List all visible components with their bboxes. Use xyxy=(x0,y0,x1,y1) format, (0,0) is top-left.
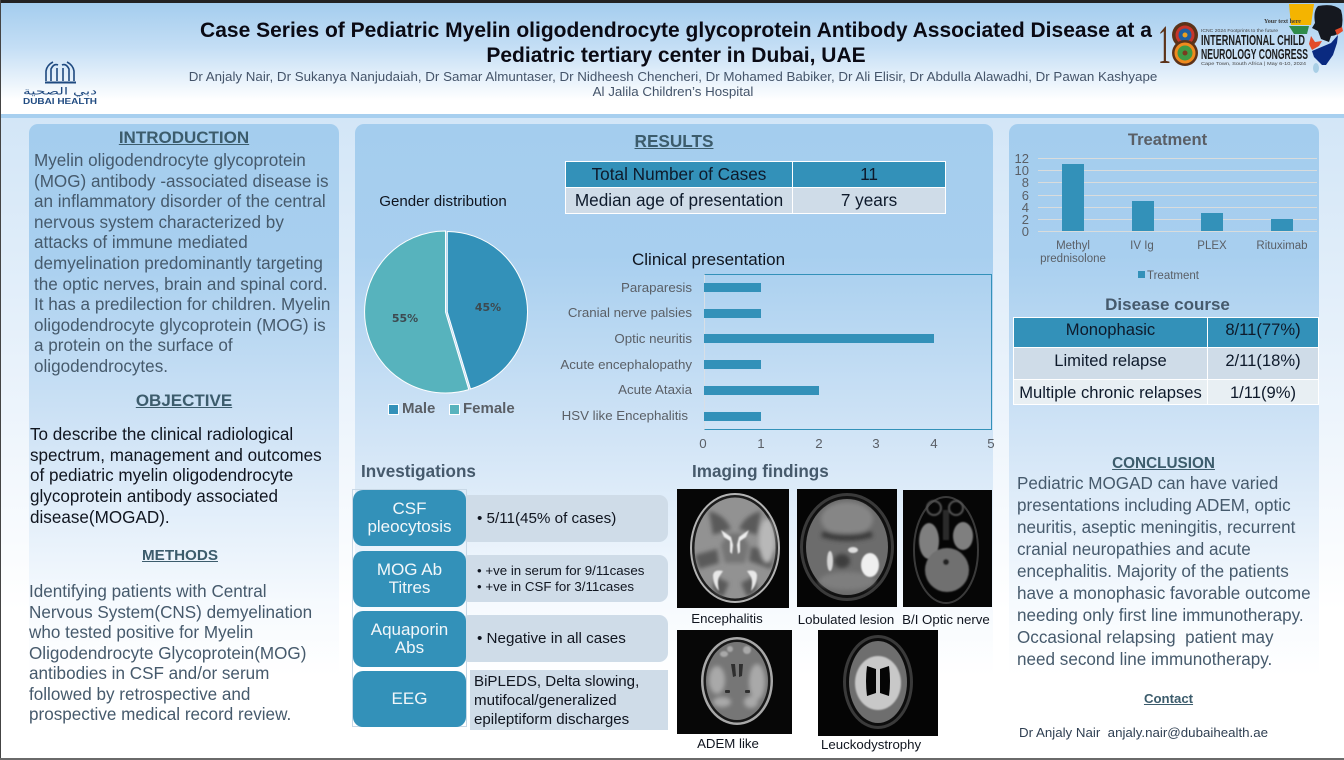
text: conclusion: have a monophasic favorable outcome xyxy=(1017,584,1311,603)
text: introduction: a protein on the surface of xyxy=(34,336,233,355)
text: conclusion xyxy=(1017,474,1311,669)
heading: investigations: Investigations xyxy=(361,462,476,481)
label: MOG: MOG Ab xyxy=(377,560,442,579)
image: lobulated lesion MRI xyxy=(797,489,897,607)
label: Aquaporin xyxy=(353,611,466,667)
caption: lobulated lesion: Lobulated lesion xyxy=(798,612,894,627)
logo: Dubai Health: دبي الصحية xyxy=(23,86,97,98)
gridlines and bars: 12 xyxy=(1015,151,1029,166)
bar chart: clinical presentation: 3 xyxy=(872,436,880,451)
result: EEG: BiPLEDS, Delta slowing, xyxy=(474,673,639,690)
title: Case Series of Pediatric Myelin oligodendrocyte glycoprotein Antibody Associated Disease at a xyxy=(200,19,1152,42)
text: introduction: an inflammatory disorder of the central xyxy=(34,192,326,211)
result: CSF: • 5/11(45% of cases) xyxy=(477,510,616,527)
contact details: Dr Anjaly Nair anjaly.nair@dubaihealth.ae xyxy=(1019,725,1268,740)
panel: treatment and conclusion xyxy=(1009,124,1319,724)
chart title: Clinical presentation xyxy=(632,250,785,269)
label: CSF xyxy=(353,490,466,546)
gridlines and bars: IV Ig xyxy=(1130,240,1154,252)
heading: introduction: INTRODUCTION xyxy=(119,128,249,147)
gridlines and bars xyxy=(1015,151,1317,282)
logo: ICNC congress xyxy=(1158,4,1343,75)
table: disease course: Multiple chronic relapses xyxy=(1019,383,1202,402)
label: CSF: pleocytosis xyxy=(367,517,452,536)
gridlines and bars: Rituximab xyxy=(1256,240,1308,252)
label: EEG xyxy=(353,671,466,727)
gridlines and bars: 8 xyxy=(1022,175,1029,190)
bar chart: clinical presentation: Acute Ataxia xyxy=(618,382,692,397)
text: objective xyxy=(30,425,322,527)
text: introduction: oligodendrocyte glycoprotein (MOG) is xyxy=(34,316,326,335)
bar chart: clinical presentation: 1 xyxy=(757,436,765,451)
summary table: 7 years xyxy=(841,190,897,210)
text: conclusion: needing only first line immunotherapy. xyxy=(1017,606,1304,625)
summary table: 11 xyxy=(860,164,878,184)
text: conclusion: encephalitis. Majority of the patients xyxy=(1017,562,1289,581)
pie chart: gender distribution: 45% xyxy=(475,301,501,314)
x axis numbers: 0 xyxy=(699,436,707,451)
text: introduction: Myelin oligodendrocyte glycoprotein xyxy=(34,151,306,170)
text: methods: Oligodendrocyte Glycoprotein(MOG) xyxy=(29,644,306,662)
pie chart: gender distribution xyxy=(364,193,528,417)
title xyxy=(200,19,1152,67)
panel: results xyxy=(355,124,993,724)
text: objective: glycoprotein antibody associated xyxy=(30,487,278,506)
summary table: Median age of presentation xyxy=(575,190,783,210)
text: conclusion: cranial neuropathies and acute xyxy=(1017,540,1251,559)
text: conclusion: Occasional relapsing patient may xyxy=(1017,628,1274,647)
bar chart: clinical presentation: 5 xyxy=(987,436,995,451)
caption: leukodystrophy: Leuckodystrophy xyxy=(821,737,921,752)
authors and hospital: Al Jalila Children’s Hospital xyxy=(593,84,753,98)
text: objective: disease(MOGAD). xyxy=(30,508,170,527)
text: methods: who tested positive for Myelin xyxy=(29,623,253,642)
text: conclusion: need second line immunotherapy. xyxy=(1017,650,1272,669)
gridlines and bars: 6 xyxy=(1022,188,1029,203)
heading: results: RESULTS xyxy=(635,131,713,151)
result: MOG: • +ve in CSF for 3/11cases xyxy=(477,578,634,594)
logo: Dubai Health xyxy=(23,61,97,106)
table: disease course xyxy=(1013,317,1319,405)
summary table xyxy=(565,161,946,214)
bar chart: clinical presentation: Optic neuritis xyxy=(614,331,692,346)
result: EEG xyxy=(470,670,668,730)
text: introduction: nervous system characterized by xyxy=(34,213,284,232)
text: introduction: attacks of immune mediated xyxy=(34,233,248,252)
legend: Female xyxy=(463,400,515,417)
result: EEG: epileptiform discharges xyxy=(474,711,629,728)
label: Aquaporin: Abs xyxy=(395,638,424,657)
heading: methods: METHODS xyxy=(142,547,218,564)
text: introduction: oligodendrocytes. xyxy=(34,357,168,376)
pie chart: gender distribution: 55% xyxy=(392,312,418,325)
result: Aquaporin: • Negative in all cases xyxy=(477,630,626,647)
result: MOG xyxy=(460,555,668,602)
text: methods: followed by retrospective and xyxy=(29,684,250,704)
label: EEG: EEG xyxy=(392,689,427,708)
text: objective: spectrum, management and outcomes xyxy=(30,446,322,465)
text: methods: antibodies in CSF and/or serum xyxy=(29,664,269,683)
text: conclusion: Pediatric MOGAD can have varied xyxy=(1017,474,1278,493)
result: EEG: mutifocal/generalized xyxy=(474,692,617,709)
heading: contact: Contact xyxy=(1144,691,1193,706)
label: MOG xyxy=(353,551,466,607)
text: objective: of pediatric myelin oligodendrocyte xyxy=(30,466,293,485)
panel: introduction, objective, methods xyxy=(29,124,339,724)
label: Aquaporin: Aquaporin xyxy=(371,620,448,639)
label: MOG: Titres xyxy=(389,578,430,597)
bar chart: clinical presentation xyxy=(560,250,995,451)
heading: conclusion: CONCLUSION xyxy=(1112,455,1215,472)
logo: ICNC congress: Cape Town, South Africa | May 6-10, 2024 xyxy=(1201,61,1306,67)
image: encephalitis MRI xyxy=(677,489,789,608)
legend xyxy=(388,400,515,417)
text: conclusion: neuritis, aseptic meningitis, recurrent xyxy=(1017,518,1295,537)
title: Pediatric tertiary center in Dubai, UAE xyxy=(486,44,866,67)
text: methods: prospective medical record review. xyxy=(29,705,291,724)
text: introduction: the optic nerves, brain and spinal cord. xyxy=(34,275,328,294)
table: disease course: 2/11(18%) xyxy=(1225,350,1301,370)
gridlines and bars: 4 xyxy=(1022,200,1029,215)
gridlines and bars: prednisolone xyxy=(1040,253,1106,265)
text: methods: Nervous System(CNS) demyelination xyxy=(29,602,312,622)
text: objective: To describe the clinical radiological xyxy=(30,425,293,444)
legend: Male xyxy=(402,400,435,417)
logo: Dubai Health: DUBAI HEALTH xyxy=(23,96,97,106)
table: disease course: Limited relapse xyxy=(1054,350,1167,370)
table: disease course: 8/11(77%) xyxy=(1225,320,1301,338)
bar chart: clinical presentation: 2 xyxy=(815,436,823,451)
chart title: Gender distribution xyxy=(379,193,507,210)
logo: ICNC congress: Your text here xyxy=(1264,18,1301,25)
bars xyxy=(704,283,761,292)
gridlines and bars: Treatment xyxy=(1147,270,1200,282)
result: MOG: • +ve in serum for 9/11cases xyxy=(477,563,644,578)
bar chart: clinical presentation: 4 xyxy=(930,436,938,451)
image captions: Encephalitis xyxy=(691,611,763,626)
text: introduction: demyelination predominantly targeting xyxy=(34,254,323,273)
heading: imaging findings: Imaging findings xyxy=(692,462,829,481)
image: leukodystrophy MRI xyxy=(818,630,938,736)
text: introduction: (MOG) antibody -associated disease is xyxy=(34,172,329,191)
text: introduction: It has a predilection for children. Myelin xyxy=(34,295,330,314)
label: CSF: CSF xyxy=(392,499,426,518)
text: methods: Identifying patients with Central xyxy=(29,582,267,601)
text: conclusion: presentations including ADEM, optic xyxy=(1017,496,1291,515)
gridlines and bars: Methyl xyxy=(1056,240,1090,252)
gridlines and bars: 0 xyxy=(1022,224,1029,239)
caption: ADEM like: ADEM like xyxy=(697,736,759,751)
authors and hospital xyxy=(189,69,1157,98)
logo: ICNC congress: 1 xyxy=(1158,14,1171,75)
bar chart: clinical presentation: HSV like Encephalitis xyxy=(562,408,688,423)
text: introduction xyxy=(34,151,330,376)
result: CSF xyxy=(460,495,668,542)
image: ADEM like MRI xyxy=(677,630,792,734)
heading: disease course: Disease course xyxy=(1105,295,1230,314)
table: disease course: 1/11(9%) xyxy=(1230,383,1296,402)
image: optic nerve MRI xyxy=(903,490,992,607)
bar chart: clinical presentation: Cranial nerve palsies xyxy=(568,305,692,320)
text: methods xyxy=(29,582,312,724)
heading: treatment: Treatment xyxy=(1128,130,1207,149)
investigations list xyxy=(352,489,467,727)
table: disease course: Monophasic xyxy=(1066,320,1155,338)
gridlines and bars: PLEX xyxy=(1197,240,1227,252)
header band xyxy=(1,3,1344,114)
gridlines and bars: 10 xyxy=(1015,163,1029,178)
authors and hospital: Dr Anjaly Nair, Dr Sukanya Nanjudaiah, Dr Samar Almuntaser, Dr Nidheesh Chencheri, Dr Mohamed Babiker, Dr Ali Elisir, Dr Abdulla Alawadhi, Dr Pawan Kashyape xyxy=(189,69,1157,84)
bar chart: treatment xyxy=(1015,151,1317,282)
bar chart: clinical presentation: Acute encephalopathy xyxy=(560,357,692,372)
heading: objective: OBJECTIVE xyxy=(136,391,232,410)
category labels: Paraparesis xyxy=(621,280,692,295)
result: Aquaporin xyxy=(460,615,668,662)
caption: optic nerve: B/I Optic nerve xyxy=(902,612,990,627)
summary table: Total Number of Cases xyxy=(592,164,766,184)
gridlines and bars: 2 xyxy=(1022,212,1029,227)
logo: ICNC congress: ICNC 2024 Footprints to the future xyxy=(1201,28,1278,33)
